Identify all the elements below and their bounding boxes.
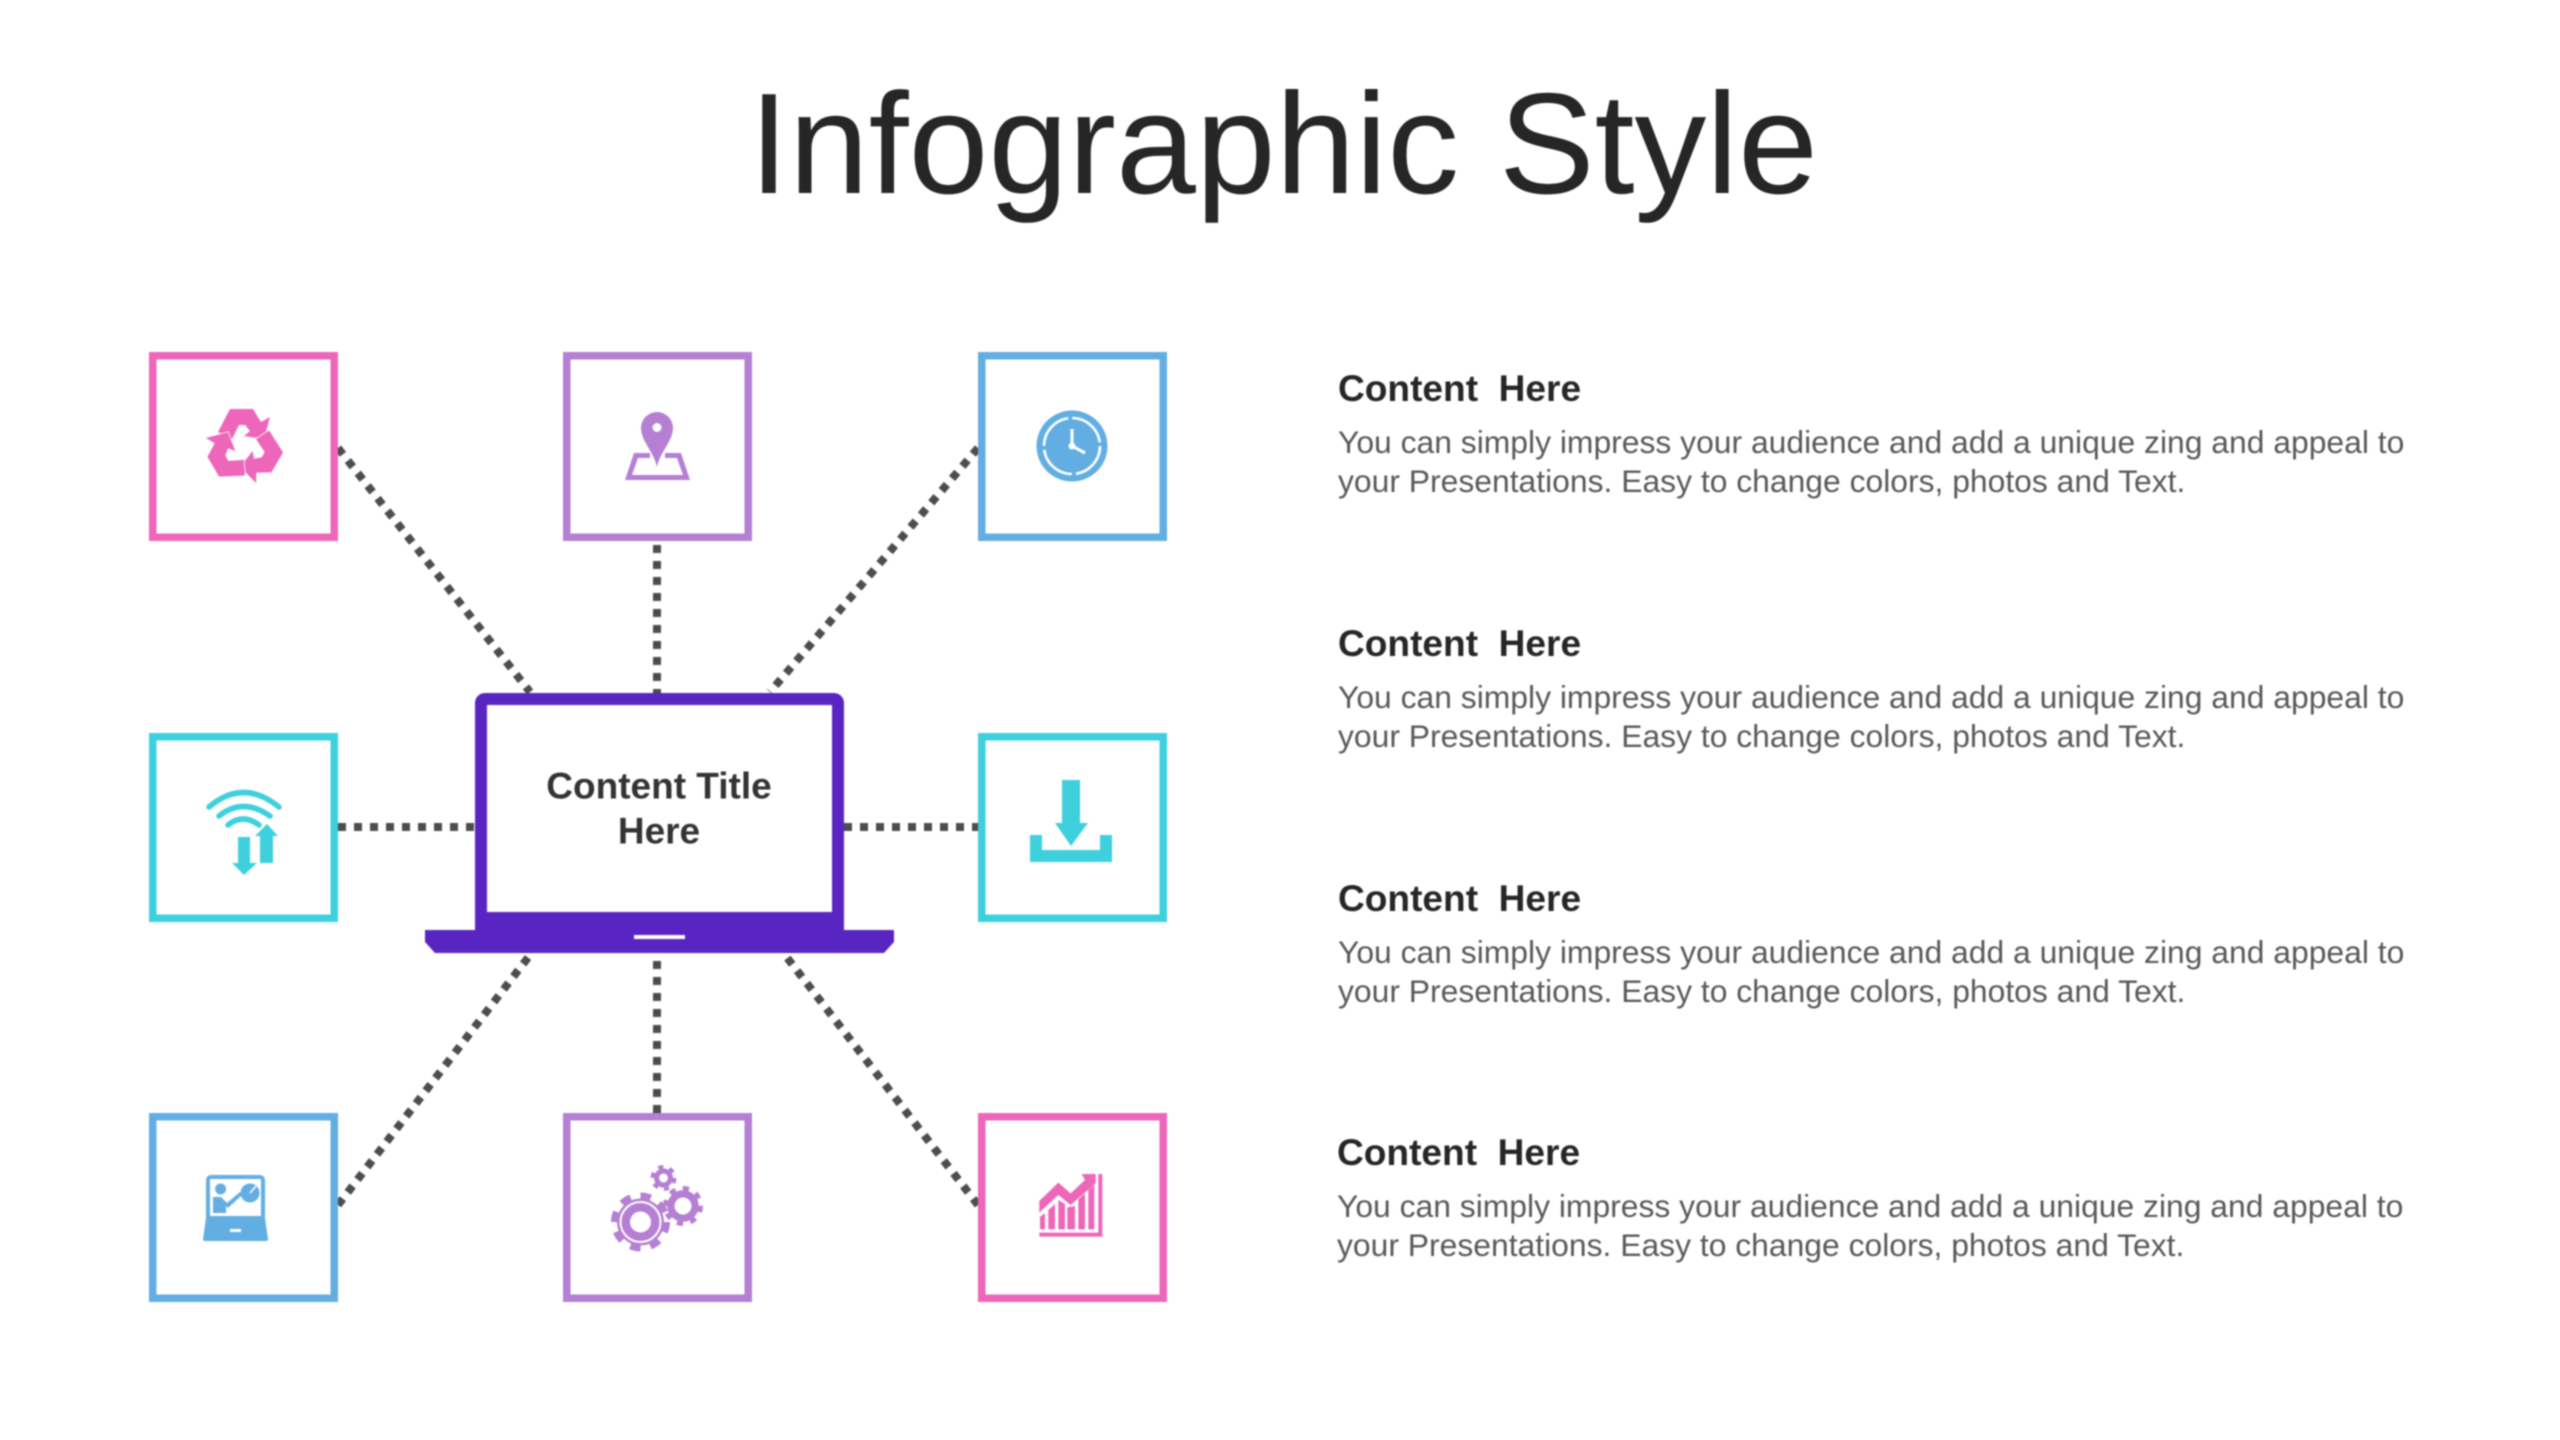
laptop with central title: Content Title — [546, 766, 772, 806]
icon: gears — [616, 1168, 700, 1247]
panel: presentation laptop icon box — [153, 1117, 334, 1298]
panel: wifi icon box — [153, 737, 334, 918]
text block 4 — [1337, 1131, 2403, 1263]
text block 2 — [1338, 622, 2404, 754]
panel: download icon box — [982, 737, 1163, 918]
panel: clock icon box — [982, 356, 1163, 537]
text block 1 — [1338, 367, 2404, 499]
panel: growth chart icon box — [982, 1117, 1163, 1298]
icon: clock — [1036, 410, 1108, 482]
text block 2: your Presentations. Easy to change colors, photos and Text. — [1338, 718, 2185, 754]
panel: location icon box — [567, 356, 748, 537]
dotted connectors — [338, 448, 978, 1205]
icon: recycle — [199, 409, 289, 487]
text block 3: Content Here — [1338, 877, 1581, 919]
text block 4: your Presentations. Easy to change colors, photos and Text. — [1337, 1227, 2184, 1263]
icon: wifi with up and down arrows — [209, 792, 279, 875]
text block 3 — [1338, 877, 2404, 1009]
icon: download — [1030, 780, 1112, 862]
laptop with central title — [425, 693, 894, 953]
text block 1: your Presentations. Easy to change colors, photos and Text. — [1338, 463, 2185, 499]
text block 1: Content Here — [1338, 367, 1581, 409]
text block 4: Content Here — [1337, 1131, 1580, 1173]
icon: map pin — [625, 412, 690, 480]
text block 2: You can simply impress your audience and add a unique zing and appeal to — [1338, 679, 2404, 715]
text block 4: You can simply impress your audience and add a unique zing and appeal to — [1337, 1188, 2403, 1224]
title: Infographic Style — [749, 64, 1818, 224]
laptop with central title: Here — [618, 810, 700, 852]
text block 1: You can simply impress your audience and add a unique zing and appeal to — [1338, 424, 2404, 460]
icon: growth chart — [1039, 1174, 1102, 1237]
text block 3: your Presentations. Easy to change colors, photos and Text. — [1338, 973, 2185, 1009]
panel: gears icon box — [567, 1117, 748, 1298]
text block 2: Content Here — [1338, 622, 1581, 664]
icon: presentation laptop — [203, 1175, 268, 1241]
text block 3: You can simply impress your audience and add a unique zing and appeal to — [1338, 934, 2404, 970]
panel: recycle icon box — [153, 356, 334, 537]
